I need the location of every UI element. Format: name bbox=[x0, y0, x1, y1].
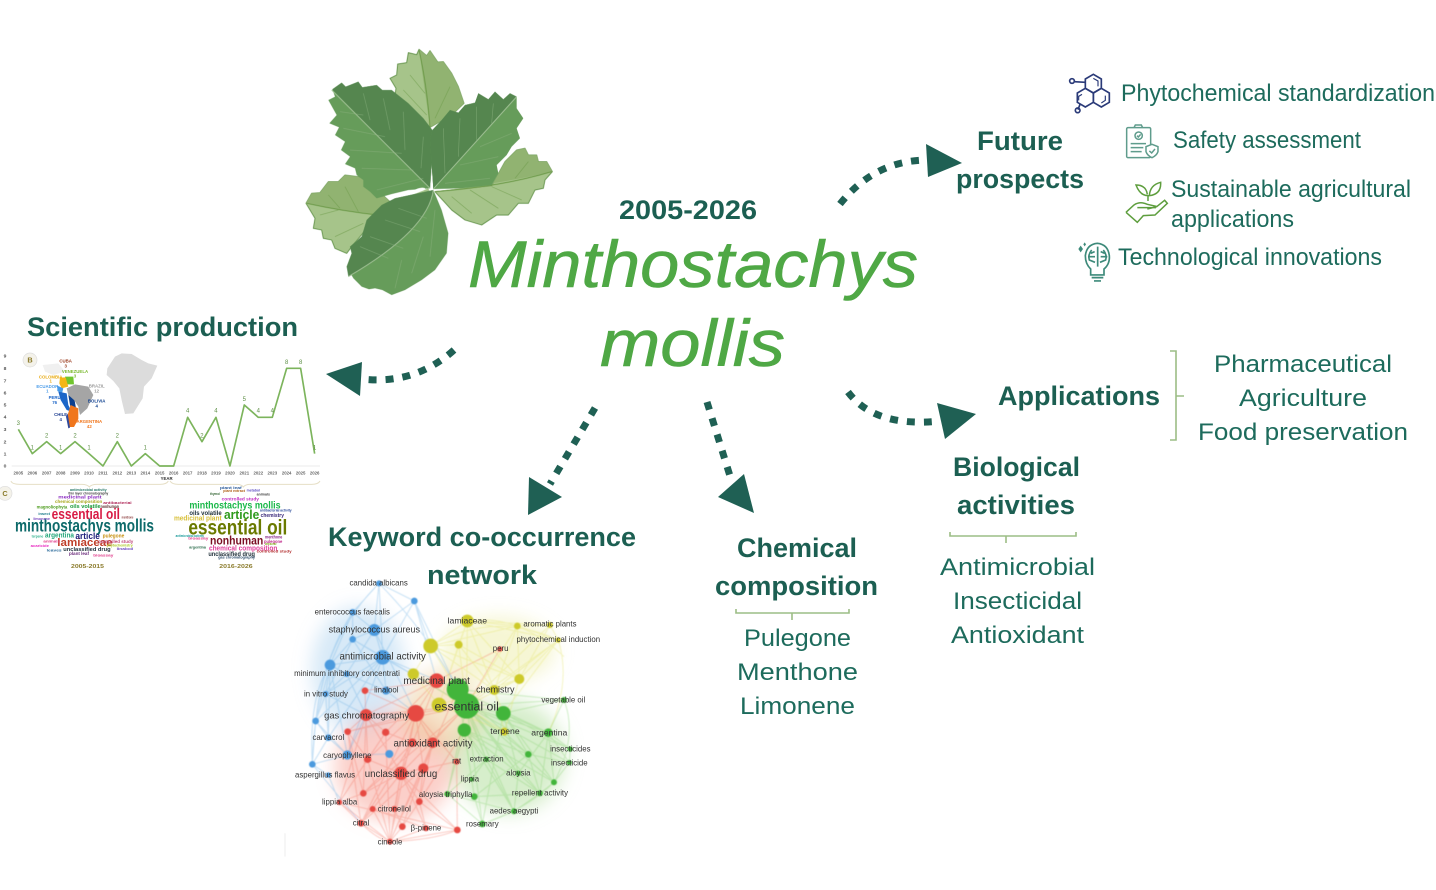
network labels: vegetable oil bbox=[541, 695, 586, 704]
map: countries: BRAZIL bbox=[89, 384, 105, 389]
network labels: candida albicans bbox=[349, 578, 408, 587]
line chart: publications per year: 2 bbox=[73, 433, 77, 439]
line chart: publications per year: 2007 bbox=[42, 471, 52, 476]
word cloud: 2005-2015: nonhuman bbox=[101, 504, 119, 510]
line chart: publications per year: 8 bbox=[4, 366, 7, 372]
arrow: to keyword network bbox=[528, 408, 595, 515]
arrow: to future prospects bbox=[840, 144, 962, 204]
map: countries: 4 bbox=[95, 403, 98, 408]
word cloud: 2016-2026: plant leaf bbox=[220, 486, 243, 490]
word cloud: 2005-2015: linalool bbox=[117, 547, 133, 551]
list: applications: Food preservation bbox=[1198, 419, 1408, 446]
word cloud: 2016-2026: controlled study bbox=[222, 496, 259, 502]
bottom leaf bbox=[347, 190, 448, 295]
word cloud: 2016-2026: 2016-2026 bbox=[219, 564, 253, 570]
line chart: publications per year: 2 bbox=[116, 433, 120, 439]
network labels: minimum inhibitory concentrati bbox=[294, 669, 400, 678]
arrow: to chemical composition bbox=[707, 402, 754, 513]
brace: 2005-2015 and 2016-2026 bbox=[11, 481, 320, 487]
left light leaf bbox=[306, 175, 392, 253]
word cloud: 2005-2015: terpene bbox=[32, 534, 43, 538]
line chart: publications per year: 2 bbox=[4, 439, 7, 445]
title: species name bbox=[468, 227, 918, 380]
map: countries: 3 bbox=[64, 364, 67, 369]
line chart: publications per year: 3 bbox=[17, 421, 21, 427]
icon: hand holding seedling bbox=[1126, 182, 1167, 222]
title: species name: mollis bbox=[600, 306, 785, 380]
network labels: antimicrobial activity bbox=[339, 651, 426, 662]
line chart: publications per year: 1 bbox=[87, 445, 91, 451]
word cloud: 2005-2015: plant leaf bbox=[69, 551, 89, 557]
line chart: publications per year: 2009 bbox=[70, 471, 80, 476]
network labels: aromatic plants bbox=[523, 620, 577, 629]
list: future prospects: Safety assessment bbox=[1173, 127, 1361, 154]
line chart: publications per year: 3 bbox=[4, 427, 7, 433]
word cloud: 2016-2026: metabol bbox=[247, 489, 260, 493]
word cloud: 2005-2015: 2005-2015 bbox=[71, 564, 104, 570]
line chart: publications per year: 1 bbox=[313, 446, 317, 452]
network labels: rat bbox=[452, 757, 462, 766]
list: applications: Agriculture bbox=[1239, 385, 1367, 412]
right large leaf bbox=[430, 92, 523, 189]
list: chemical composition: Pulegone bbox=[744, 625, 851, 652]
line chart: publications per year: 2025 bbox=[296, 471, 306, 476]
line chart: publications per year: YEAR bbox=[161, 476, 174, 481]
line chart: publications per year: 2011 bbox=[98, 471, 108, 476]
line chart: publications per year: 2013 bbox=[126, 471, 137, 476]
word cloud: 2016-2026: pulegone bbox=[264, 539, 283, 544]
network labels: enterococcus faecalis bbox=[315, 607, 390, 616]
word cloud: 2005-2015: acaricide bbox=[31, 544, 49, 548]
map: countries: CUBA bbox=[59, 359, 73, 364]
bracket: chemical composition bbox=[736, 609, 849, 620]
word cloud: 2005-2015 bbox=[15, 488, 154, 570]
word cloud: 2016-2026: controlled study bbox=[257, 549, 293, 553]
network labels: unclassified drug bbox=[365, 769, 437, 780]
icon: molecule bbox=[1070, 74, 1109, 113]
line chart: publications per year: 4 bbox=[4, 415, 7, 421]
word cloud: 2005-2015: magnoliophyta bbox=[37, 504, 68, 509]
line chart: publications per year: 2019 bbox=[211, 471, 221, 476]
word cloud: 2005-2015: phytochemistry bbox=[107, 544, 134, 548]
network labels: cineole bbox=[378, 837, 402, 846]
heading: chemical composition: Chemical bbox=[737, 533, 857, 563]
network labels: chemistry bbox=[476, 685, 515, 695]
list: biological activities: Insecticidal bbox=[953, 588, 1082, 615]
word cloud: 2016-2026: article bbox=[224, 507, 259, 522]
map: countries: CHILE bbox=[54, 412, 67, 417]
list: biological activities bbox=[940, 554, 1095, 649]
line chart: publications per year: 2021 bbox=[239, 471, 250, 476]
map: countries: 42 bbox=[87, 424, 92, 429]
network labels: gas chromatography bbox=[324, 710, 410, 720]
title: species name: Minthostachys bbox=[468, 227, 918, 301]
network labels: peru bbox=[493, 644, 508, 653]
word cloud: 2016-2026: thymol bbox=[210, 492, 220, 496]
line chart: publications per year: 9 bbox=[4, 354, 7, 360]
heading: future prospects bbox=[956, 126, 1084, 194]
word cloud: 2005-2015: antimicrobial activity bbox=[70, 488, 108, 492]
arrow: to biological activities and applications bbox=[848, 392, 976, 439]
word cloud: 2005-2015: thin layer chromatography bbox=[68, 492, 109, 496]
heading: applications: Applications bbox=[998, 381, 1160, 411]
line chart: publications per year: 2022 bbox=[253, 471, 264, 476]
line chart: publications per year: 8 bbox=[299, 360, 303, 366]
word cloud: 2016-2026: essential oil bbox=[188, 515, 287, 539]
network labels: insecticide bbox=[551, 758, 588, 767]
line chart: publications per year: 2024 bbox=[282, 471, 292, 476]
label: panel B bbox=[23, 353, 37, 367]
network labels: phytochemical induction bbox=[517, 635, 600, 644]
map: countries: ECUADOR bbox=[36, 384, 59, 389]
line chart: publications per year bbox=[4, 354, 320, 481]
network nodes bbox=[309, 580, 573, 845]
bracket: applications bbox=[1170, 351, 1184, 440]
heading: keyword co-occurrence network: network bbox=[427, 560, 538, 590]
word cloud: 2005-2015: limonene bbox=[33, 517, 50, 521]
line chart: publications per year: 0 bbox=[4, 464, 7, 470]
network labels: antioxidant activity bbox=[394, 738, 473, 749]
network labels: aspergillus flavus bbox=[295, 770, 355, 779]
line chart: publications per year: 2017 bbox=[183, 471, 193, 476]
line chart: publications per year: 4 bbox=[257, 409, 261, 415]
network labels: caryophyllene bbox=[323, 751, 371, 760]
map: countries: 76 bbox=[52, 400, 58, 405]
icon: clipboard check bbox=[1127, 125, 1158, 158]
list: future prospects bbox=[1118, 80, 1435, 271]
word cloud: 2016-2026: lamiaceae bbox=[265, 542, 277, 546]
bracket: biological activities bbox=[950, 532, 1076, 543]
line chart: publications per year: 2 bbox=[200, 433, 204, 439]
word cloud: 2016-2026: chemistry bbox=[261, 513, 284, 519]
line chart: publications per year: 2026 bbox=[310, 471, 320, 476]
word cloud: 2005-2015: essential oil bbox=[52, 507, 120, 523]
word cloud: 2005-2015: minthostachys mollis bbox=[15, 516, 154, 536]
list: chemical composition bbox=[737, 625, 858, 720]
line chart: publications per year: 8 bbox=[285, 360, 289, 366]
line chart: publications per year: 5 bbox=[4, 403, 7, 409]
icon: brain light bulb bbox=[1078, 242, 1109, 281]
map: countries: BOLIVIA bbox=[88, 398, 106, 403]
word cloud: 2016-2026: minthostachys mollis bbox=[189, 500, 281, 511]
list: future prospects: Technological innovations bbox=[1118, 244, 1382, 271]
word cloud: 2005-2015: antibacterial bbox=[103, 501, 132, 505]
map: countries: 4 bbox=[59, 417, 62, 422]
network labels: carvacrol bbox=[312, 733, 344, 742]
list: future prospects: Sustainable agricultural bbox=[1171, 176, 1411, 203]
word cloud: 2016-2026: argentina bbox=[189, 545, 207, 549]
network labels: citral bbox=[353, 819, 370, 828]
word cloud: 2016-2026: antimicrobial activity bbox=[176, 534, 205, 538]
line chart: publications per year: 7 bbox=[4, 378, 7, 384]
word cloud: 2005-2015: medicinal plant bbox=[58, 494, 102, 499]
word cloud: 2016-2026: antibacterial activity bbox=[260, 509, 293, 513]
word cloud: 2016-2026: nonhuman bbox=[210, 533, 263, 547]
label: panel B: B bbox=[27, 356, 33, 365]
network labels bbox=[294, 578, 600, 846]
line chart: publications per year: 1 bbox=[144, 446, 148, 452]
word cloud: 2005-2015: oils volatile bbox=[70, 504, 101, 510]
network labels: extraction bbox=[470, 755, 504, 764]
list: future prospects: applications bbox=[1171, 206, 1294, 233]
word cloud: 2005-2015: menthone bbox=[122, 515, 133, 519]
line chart: publications per year: 6 bbox=[4, 390, 7, 396]
map: countries: 1 bbox=[46, 389, 49, 394]
heading: scientific production: Scientific production bbox=[27, 312, 298, 342]
network labels: in vitro study bbox=[304, 689, 348, 698]
map: countries: ARGENTINA bbox=[76, 419, 103, 424]
network labels: aedes aegypti bbox=[490, 807, 539, 816]
label: panel C: C bbox=[2, 489, 8, 498]
map: countries: VENEZUELA bbox=[62, 369, 89, 374]
network labels: insecticides bbox=[550, 744, 591, 753]
list: applications bbox=[1198, 351, 1408, 446]
line chart: publications per year: 2020 bbox=[225, 471, 235, 476]
list: chemical composition: Menthone bbox=[737, 659, 858, 686]
word cloud: 2005-2015: argentina bbox=[45, 533, 74, 540]
line chart: publications per year: 4 bbox=[186, 409, 190, 415]
network labels: staphylococcus aureus bbox=[329, 625, 421, 635]
line chart: publications per year: 5 bbox=[243, 397, 247, 403]
line chart: publications per year: 2 bbox=[45, 433, 49, 439]
word cloud: 2016-2026: plant extract bbox=[223, 489, 246, 493]
map: countries: 12 bbox=[94, 388, 100, 393]
heading: biological activities: activities bbox=[957, 490, 1075, 520]
map: countries: PERU bbox=[49, 395, 61, 400]
word cloud: 2005-2015: chemical composition bbox=[55, 499, 102, 505]
line chart: publications per year: 1 bbox=[4, 452, 7, 458]
word cloud: 2005-2015: insect bbox=[38, 512, 51, 516]
list: applications: Pharmaceutical bbox=[1214, 351, 1392, 378]
list: biological activities: Antioxidant bbox=[951, 622, 1084, 649]
network labels: linalool bbox=[374, 685, 399, 694]
line chart: publications per year: 2016 bbox=[169, 471, 179, 476]
word cloud: 2016-2026: menthone bbox=[265, 535, 283, 540]
word cloud: 2016-2026: gas chromatography bbox=[218, 555, 256, 559]
line chart: publications per year: 4 bbox=[271, 409, 275, 415]
word cloud: 2016-2026: bioassay bbox=[188, 537, 210, 541]
word cloud: 2005-2015: controlled study bbox=[98, 539, 134, 545]
heading: keyword co-occurrence network: Keyword co-occurrence bbox=[328, 522, 636, 552]
network labels: aloysia bbox=[506, 769, 531, 778]
network labels: citronellol bbox=[378, 805, 411, 814]
network labels: medicinal plant bbox=[403, 676, 470, 687]
word cloud: 2005-2015: pulegone bbox=[103, 533, 124, 539]
network labels: argentina bbox=[531, 728, 568, 738]
map: countries bbox=[36, 353, 157, 429]
word cloud: 2005-2015: lamiaceae bbox=[57, 537, 113, 549]
heading: biological activities bbox=[953, 452, 1080, 520]
network: keyword co-occurrence bbox=[285, 578, 600, 857]
heading: chemical composition: composition bbox=[715, 571, 878, 601]
line chart: publications per year: 2012 bbox=[113, 471, 123, 476]
title: years: 2005-2026 bbox=[619, 195, 757, 225]
left large leaf bbox=[328, 82, 432, 198]
network labels: aloysia triphylla bbox=[419, 790, 473, 799]
map: countries: 1 bbox=[49, 379, 52, 384]
network labels: lippia alba bbox=[322, 797, 358, 806]
word cloud: 2005-2015: leaves bbox=[47, 549, 62, 553]
network labels: essential oil bbox=[434, 699, 499, 713]
network labels: lippia bbox=[461, 775, 480, 784]
right light leaf bbox=[435, 148, 552, 225]
line chart: publications per year: 1 bbox=[59, 445, 63, 451]
network labels: terpene bbox=[490, 726, 520, 736]
list: biological activities: Antimicrobial bbox=[940, 554, 1095, 581]
network labels: β-pinene bbox=[411, 823, 441, 832]
network labels: repellent activity bbox=[512, 789, 568, 798]
word cloud: 2005-2015: unclassified drug bbox=[63, 547, 111, 553]
line chart: publications per year: 2006 bbox=[28, 471, 38, 476]
list: chemical composition: Limonene bbox=[740, 693, 855, 720]
label: panel C bbox=[0, 486, 12, 500]
top leaf bbox=[390, 49, 464, 127]
network links bbox=[312, 583, 570, 842]
line chart: publications per year: 1 bbox=[31, 445, 35, 451]
word cloud: 2005-2015: article bbox=[75, 531, 100, 541]
heading: future prospects: prospects bbox=[956, 164, 1084, 194]
line chart: publications per year: 2018 bbox=[197, 471, 207, 476]
word cloud: 2016-2026: unclassified drug bbox=[208, 552, 255, 558]
map: countries: COLOMBIA bbox=[39, 374, 63, 379]
word cloud: 2016-2026: chemical composition bbox=[209, 546, 277, 553]
line chart: publications per year: 2014 bbox=[140, 471, 151, 476]
line chart: publications per year: 2015 bbox=[155, 471, 165, 476]
map: countries: 3 bbox=[74, 374, 77, 379]
heading: keyword co-occurrence network bbox=[328, 522, 636, 590]
line chart: publications per year: 2008 bbox=[56, 471, 66, 476]
network labels: rosemary bbox=[466, 820, 499, 829]
word cloud: 2005-2015: animals bbox=[43, 539, 60, 543]
heading: future prospects: Future bbox=[977, 126, 1063, 156]
word cloud: 2005-2015: bioassay bbox=[93, 554, 115, 558]
line chart: publications per year: 4 bbox=[214, 409, 218, 415]
word cloud: 2016-2026 bbox=[174, 486, 293, 570]
word cloud: 2016-2026: animals bbox=[257, 493, 270, 497]
arrow: to scientific production bbox=[326, 350, 454, 396]
heading: chemical composition bbox=[715, 533, 878, 601]
word cloud: 2016-2026: medicinal plant bbox=[174, 516, 222, 523]
icon: mint leaves bbox=[306, 49, 552, 295]
network labels: lamiaceae bbox=[448, 616, 487, 626]
panel: scientific production charts bbox=[0, 353, 320, 570]
word cloud: 2016-2026: oils volatile bbox=[189, 511, 222, 517]
line chart: publications per year: 2023 bbox=[267, 471, 278, 476]
network link haze bbox=[312, 607, 565, 822]
heading: biological activities: Biological bbox=[953, 452, 1080, 482]
line chart: publications per year: 2005 bbox=[14, 471, 24, 476]
line chart: publications per year: 2010 bbox=[84, 471, 94, 476]
